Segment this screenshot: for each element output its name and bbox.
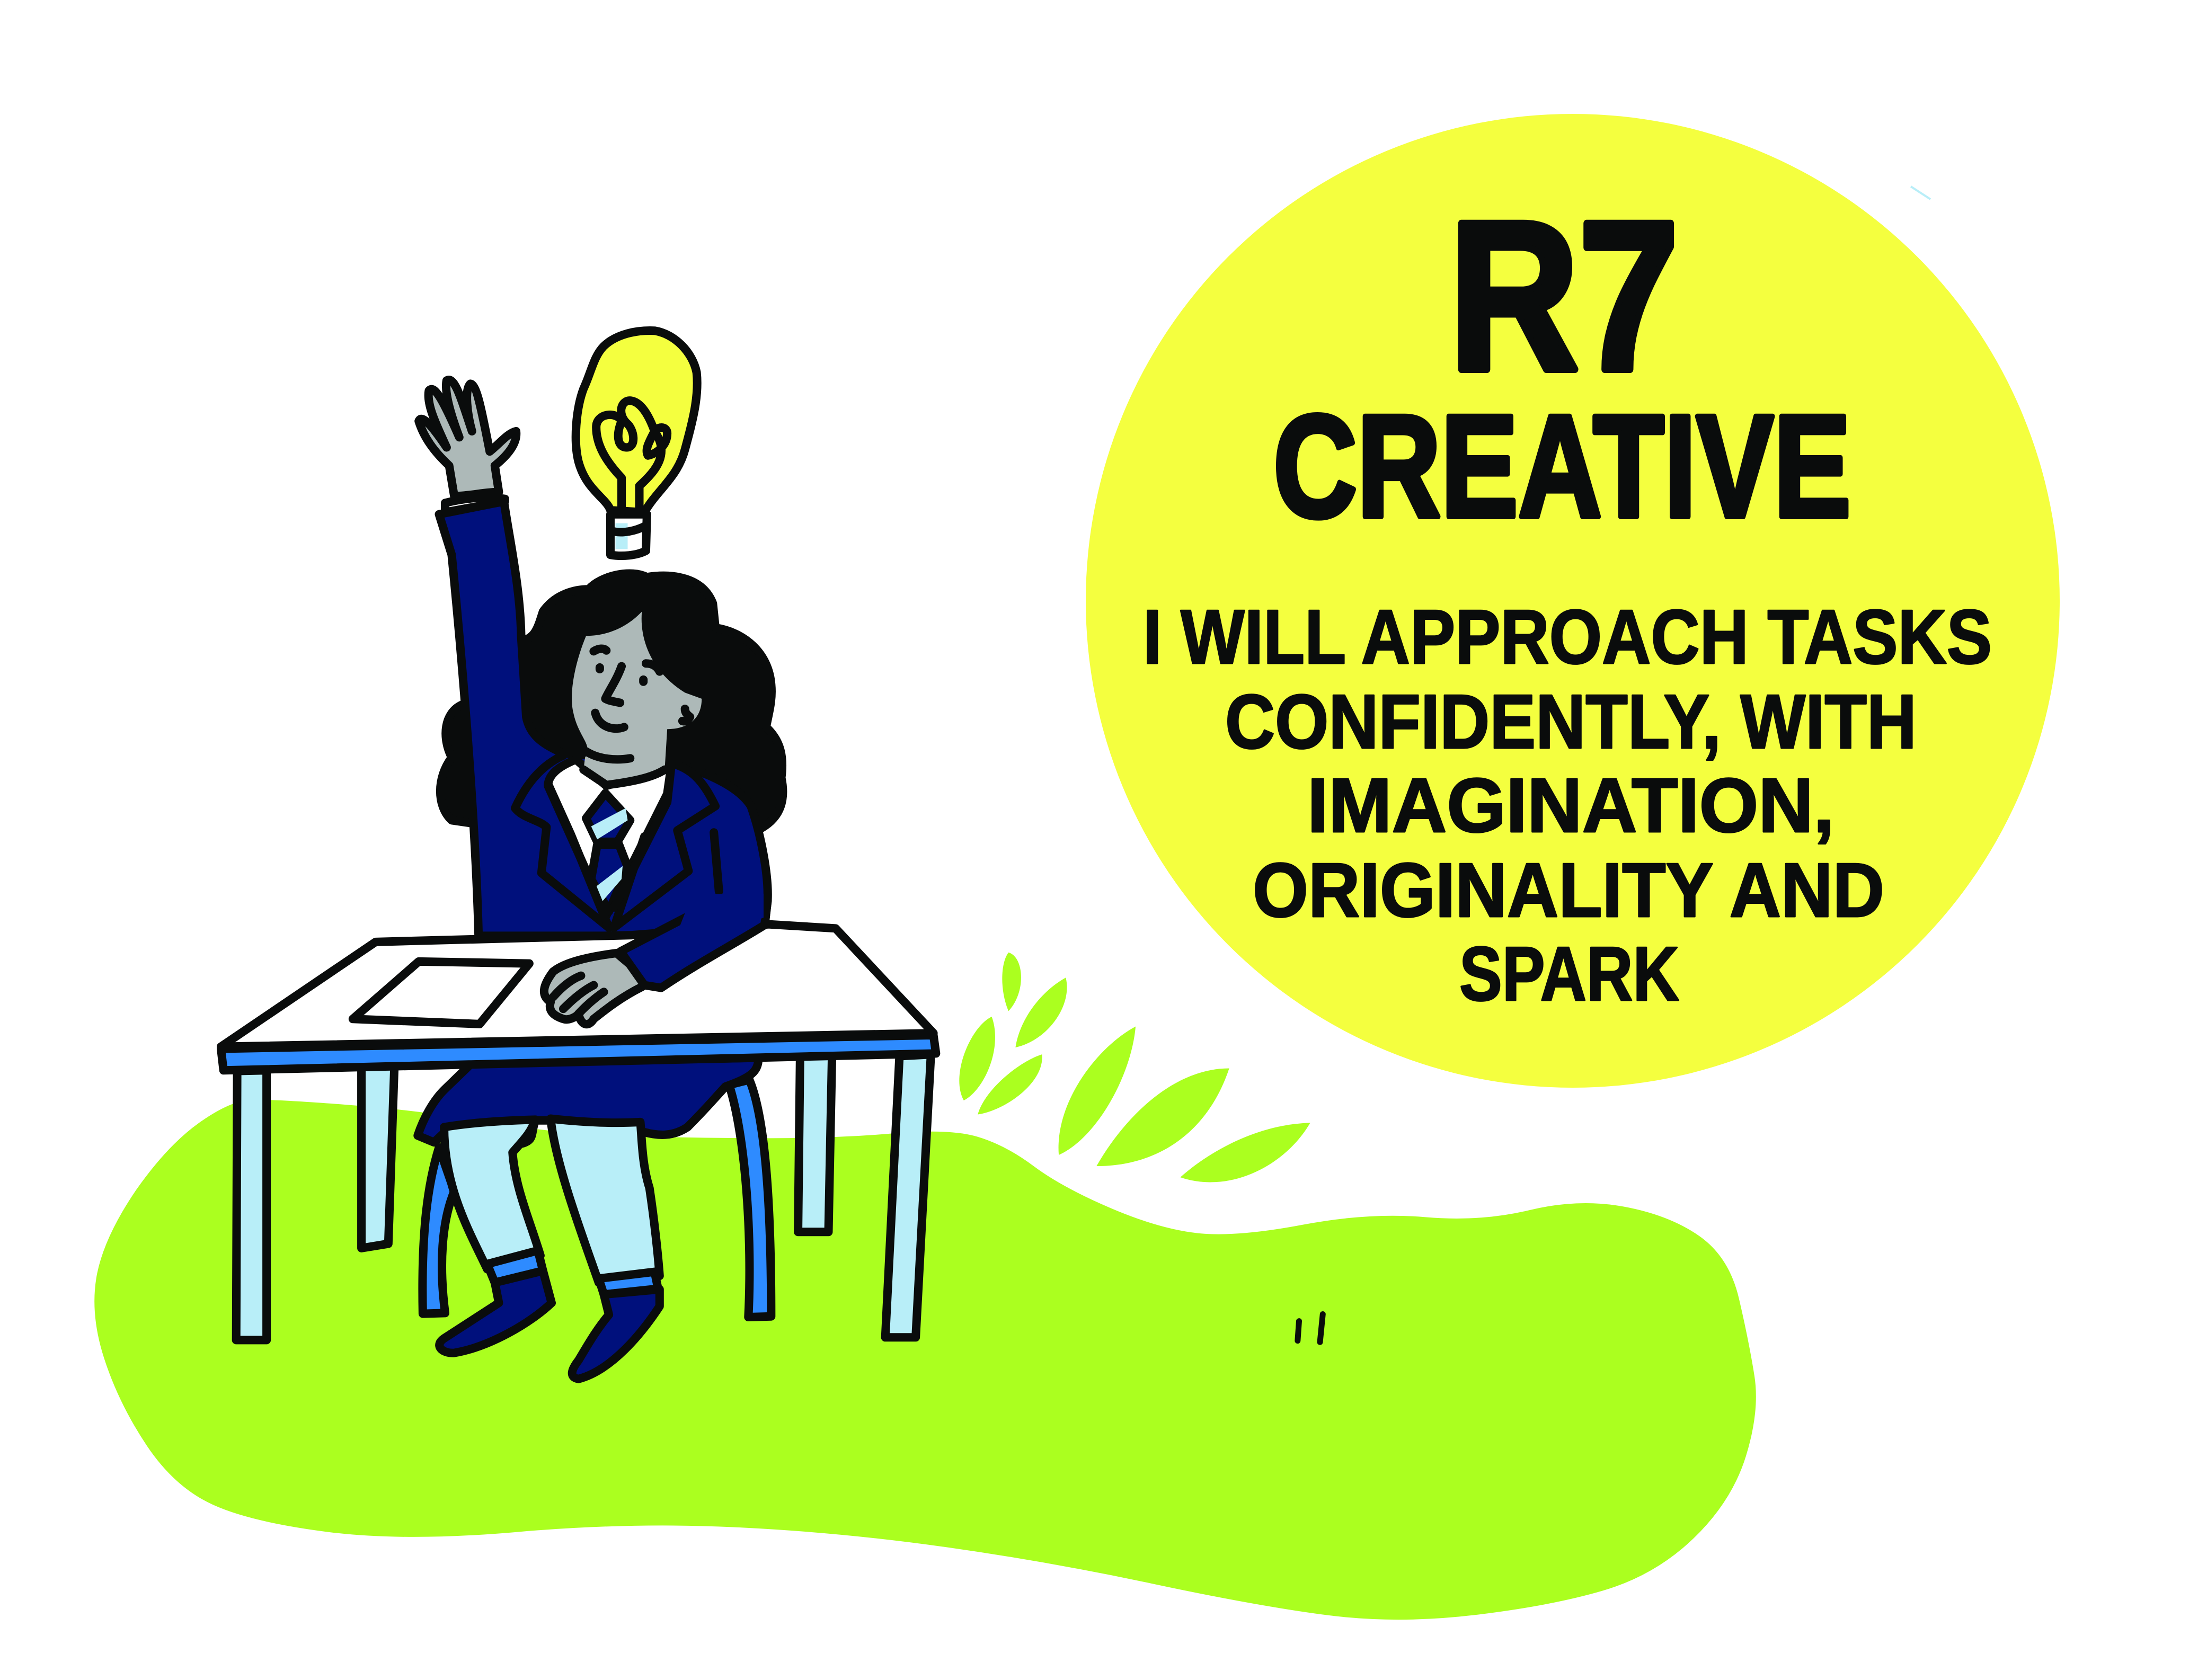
skirt bbox=[418, 1058, 758, 1144]
line 5: SPARK bbox=[1459, 931, 1679, 1017]
filament bbox=[596, 401, 667, 512]
desk top bbox=[221, 925, 934, 1047]
shirt cuff bbox=[445, 497, 505, 512]
hair bbox=[525, 573, 783, 829]
green leaves bbox=[959, 953, 1310, 1182]
left sock stripe bbox=[487, 1250, 543, 1283]
right leg bbox=[551, 1119, 660, 1283]
hair behind arm bbox=[440, 705, 480, 824]
sheet of paper bbox=[353, 962, 529, 1024]
line 1: I WILL APPROACH TASKS bbox=[1143, 594, 1992, 680]
jacket and raised arm bbox=[439, 501, 768, 936]
left sock bbox=[439, 1271, 552, 1353]
tie body bbox=[591, 845, 628, 911]
heading: R7: R7 bbox=[1449, 177, 1679, 414]
bulb base bbox=[610, 514, 647, 556]
student lower body bbox=[418, 1058, 758, 1379]
grass ticks bbox=[1298, 1314, 1323, 1342]
right sock bbox=[572, 1290, 660, 1379]
line 2: CONFIDENTLY, WITH bbox=[1225, 679, 1917, 765]
front legs bbox=[236, 1070, 267, 1340]
left leg bbox=[444, 1119, 540, 1269]
green ground bbox=[94, 1100, 1756, 1620]
finger lines bbox=[553, 976, 604, 1014]
yellow speech circle bbox=[1086, 114, 2060, 1088]
statement text bbox=[1143, 594, 1992, 1017]
lower sleeve and hand bbox=[544, 894, 768, 1024]
face bbox=[572, 611, 702, 785]
desk bbox=[221, 925, 936, 1340]
line 3: IMAGINATION, bbox=[1307, 762, 1834, 848]
sleeve bbox=[621, 901, 768, 988]
blue desk edge bbox=[221, 1035, 936, 1070]
stray pale mark bbox=[1911, 186, 1930, 199]
right sock stripe bbox=[599, 1272, 658, 1294]
raised hand bbox=[419, 380, 516, 496]
icon: light bulb bbox=[576, 331, 697, 556]
icon: chair legs bbox=[422, 1080, 771, 1317]
heading: CREATIVE: CREATIVE bbox=[1273, 385, 1851, 548]
white shirt bbox=[548, 760, 671, 915]
student upper body bbox=[419, 380, 783, 936]
desk back legs bbox=[361, 1055, 832, 1248]
lapel lines bbox=[515, 755, 719, 928]
line 4: ORIGINALITY AND bbox=[1253, 847, 1884, 933]
facial features bbox=[583, 649, 690, 785]
bulb glass bbox=[576, 331, 697, 512]
resting hand bbox=[544, 953, 644, 1024]
tie bbox=[586, 793, 630, 911]
tie knot bbox=[586, 793, 630, 842]
